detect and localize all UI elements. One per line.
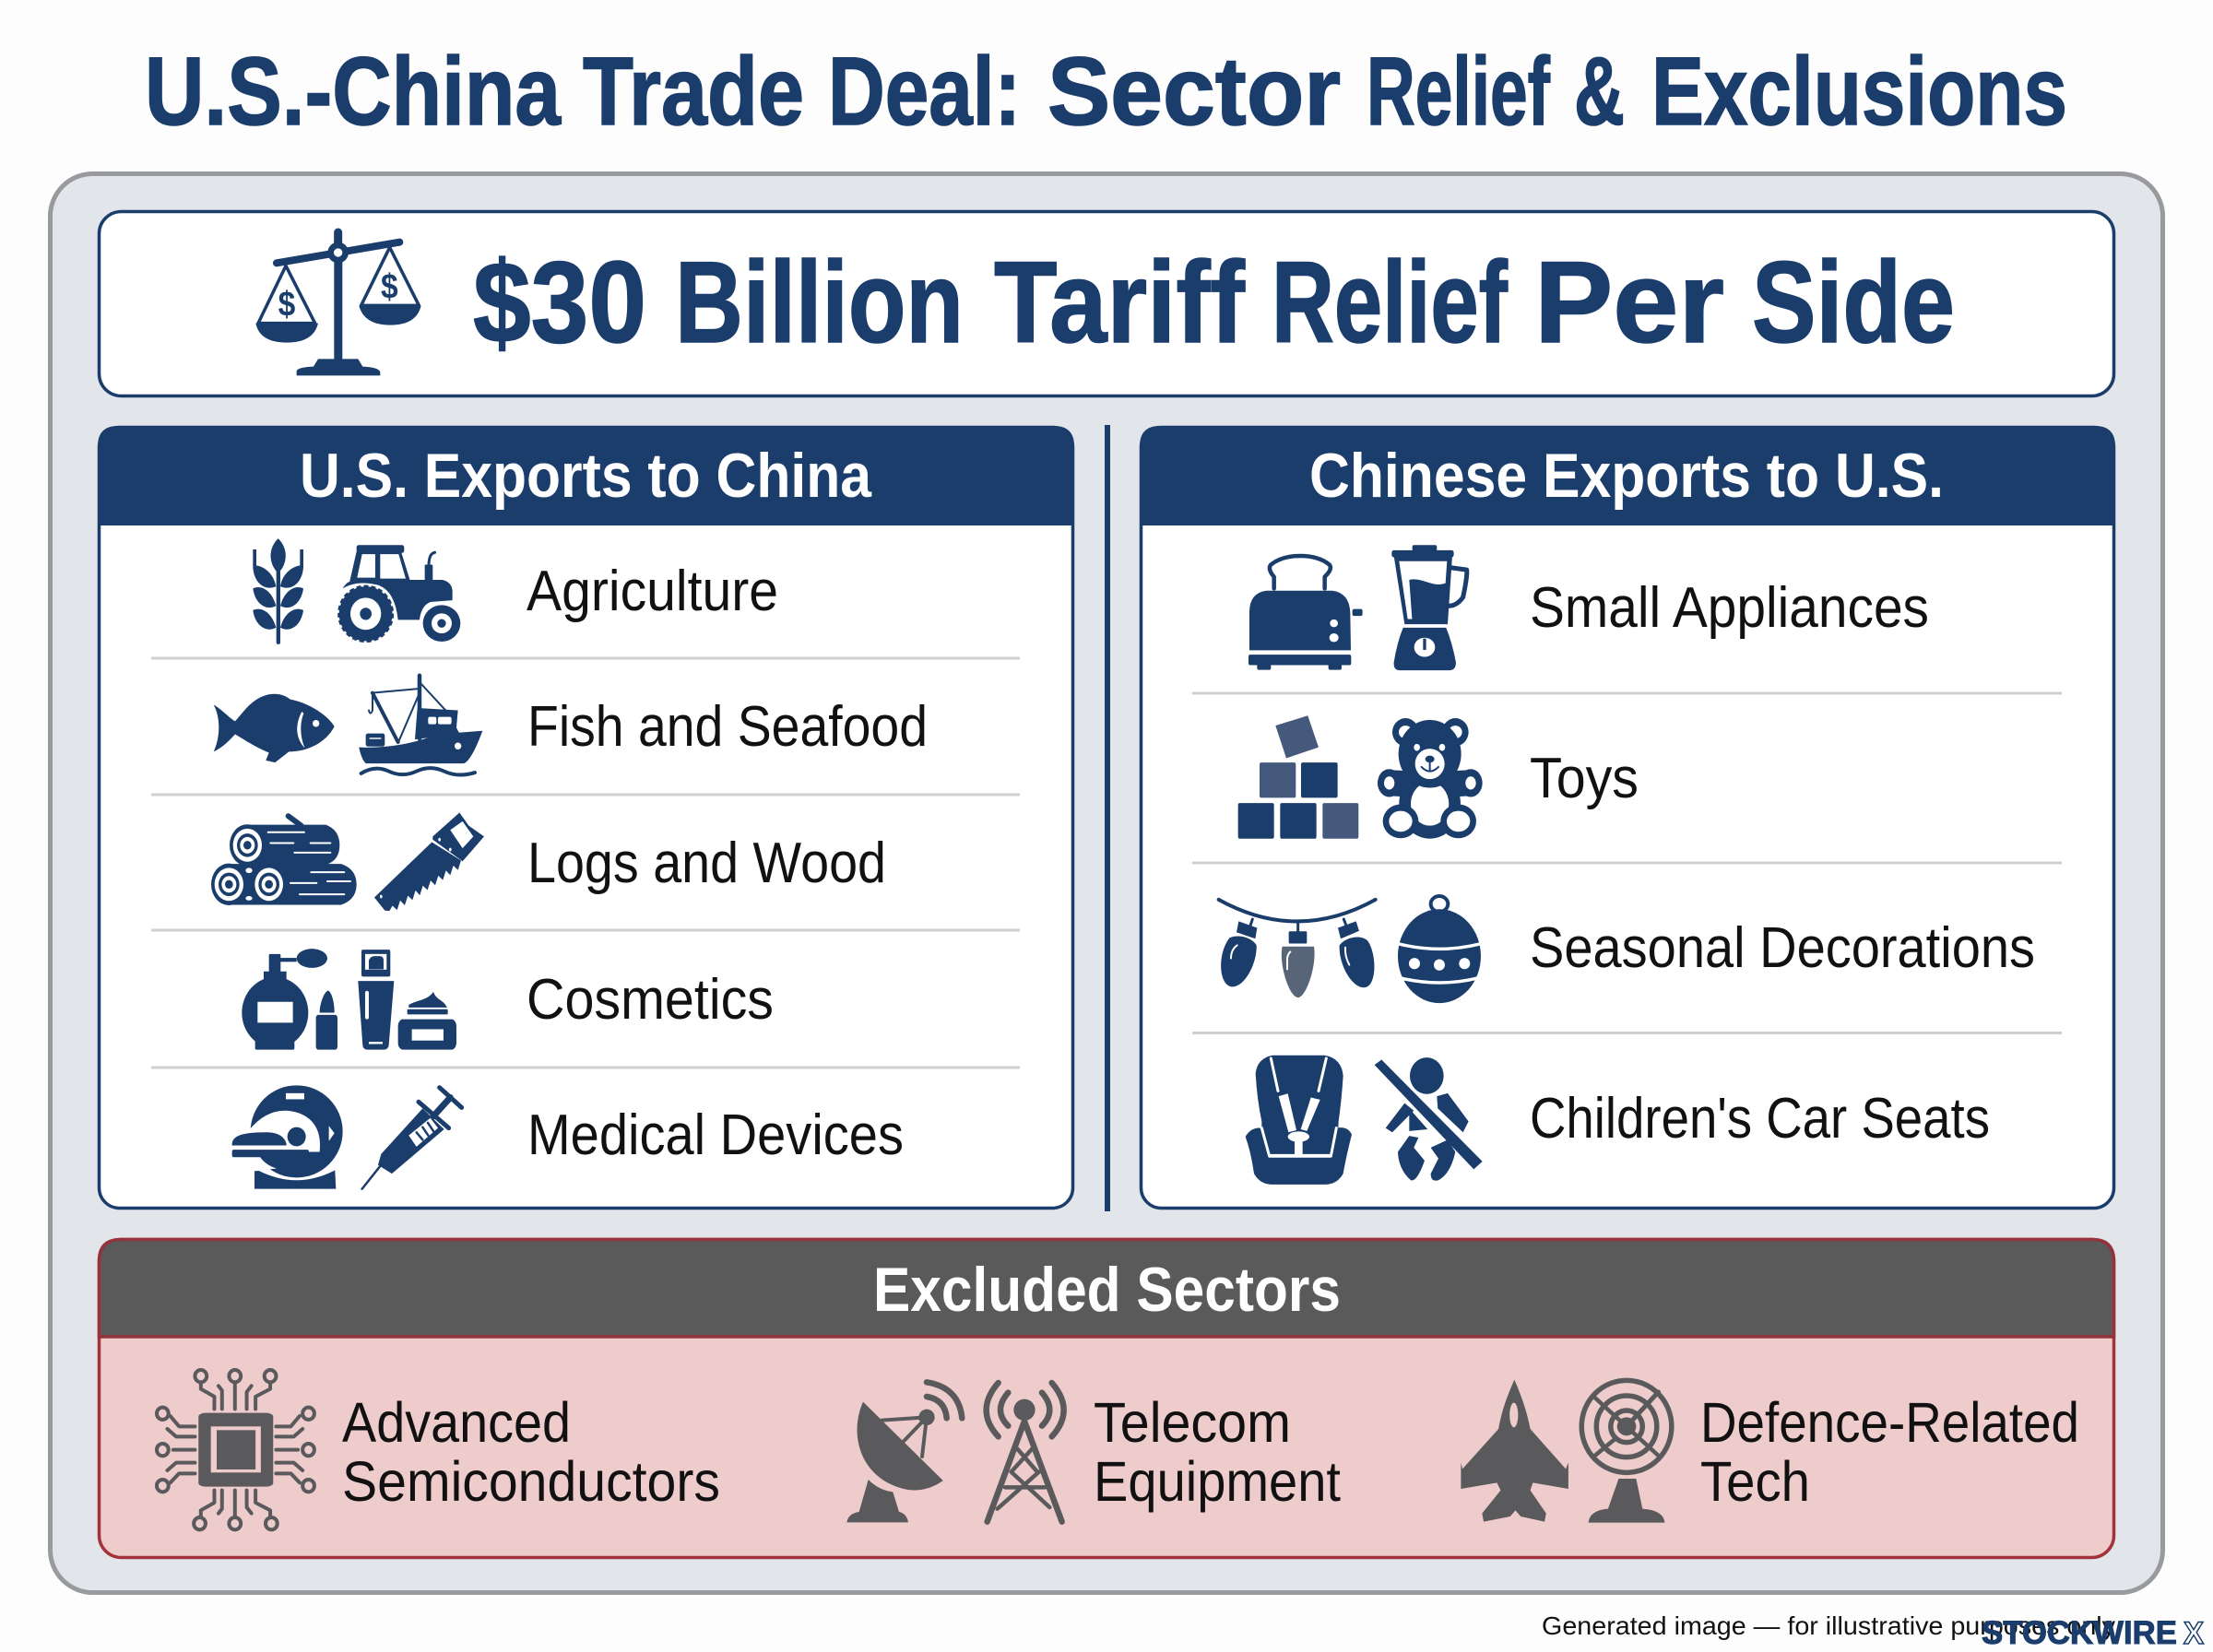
- icon: balance scale with dollars: $: [278, 285, 295, 324]
- panel heading: Excluded Sectors: [873, 1255, 1341, 1325]
- icons: Chinese export sectors: [1219, 545, 1483, 1185]
- banner headline: [473, 239, 1955, 367]
- banner headline: Side: [1752, 239, 1955, 367]
- label: defence-related tech: Defence-Related: [1700, 1391, 2079, 1454]
- icon: string lights: [1219, 900, 1376, 997]
- panel heading: Chinese Exports to U.S.: [1309, 441, 1944, 511]
- icon: cream jar: [398, 992, 456, 1050]
- panel: tariff relief banner: [100, 212, 2113, 396]
- label: defence-related tech: Tech: [1700, 1450, 1810, 1513]
- title: &: [1574, 38, 1625, 146]
- icon: perfume bottle: [242, 949, 327, 1050]
- label: cosmetics: Cosmetics: [527, 968, 774, 1032]
- title: [145, 38, 2067, 146]
- icon: semiconductor chip: [157, 1370, 314, 1529]
- icon: balance scale with dollars: $: [381, 266, 398, 306]
- banner headline: $30: [473, 239, 646, 367]
- icon: blender: [1391, 545, 1467, 670]
- panel: excluded sectors: [100, 1239, 2113, 1558]
- label: telecom equipment: Equipment: [1094, 1450, 1341, 1513]
- icon: fish: [214, 694, 335, 762]
- icon: tractor: [337, 545, 463, 645]
- label: advanced semiconductors: Semiconductors: [342, 1450, 720, 1513]
- icon: antenna tower: [987, 1383, 1064, 1522]
- icon: syringe: [362, 1088, 462, 1189]
- title: Trade: [583, 38, 804, 146]
- icon: satellite dish: [846, 1382, 962, 1522]
- banner headline: Tariff: [994, 239, 1245, 367]
- icon: ornament: [1398, 896, 1481, 1003]
- label: logs and wood: Logs and Wood: [527, 832, 886, 895]
- footer note: Generated image — for illustrative purposes only: [1542, 1611, 2115, 1640]
- icon: radar: [1581, 1380, 1672, 1523]
- label: fish and seafood: Fish and Seafood: [527, 695, 928, 759]
- icon: lotion tube: [358, 950, 394, 1050]
- icons: U.S. export sectors: [211, 538, 484, 1189]
- label: agriculture: Agriculture: [527, 560, 778, 623]
- icon: MRI scanner: [232, 1085, 343, 1189]
- title: Relief: [1367, 38, 1551, 146]
- panel: Chinese exports to U.S.: [1140, 426, 2115, 1208]
- label: medical devices: Medical Devices: [527, 1103, 904, 1167]
- logo: StockWire X: X: [2183, 1616, 2204, 1651]
- label: telecom equipment: Telecom: [1094, 1391, 1291, 1454]
- label: seasonal decorations: Seasonal Decorations: [1530, 916, 2035, 980]
- banner headline: Relief: [1272, 239, 1508, 367]
- icon: toaster: [1249, 556, 1363, 670]
- icon: child car seat: [1246, 1056, 1352, 1185]
- title: Deal:: [828, 38, 1021, 146]
- label: advanced semiconductors: Advanced: [342, 1391, 571, 1454]
- icon: teddy bear: [1378, 718, 1483, 839]
- label: small appliances: Small Appliances: [1530, 576, 1929, 640]
- icon: crossed-out baby: [1375, 1057, 1483, 1181]
- label: telecom equipment: [1094, 1391, 1341, 1513]
- icon: lipstick: [316, 991, 337, 1050]
- icon: balance scale with dollars: [255, 232, 421, 375]
- icon: wheat: [253, 538, 303, 644]
- label: children's car seats: Children's Car Seats: [1530, 1087, 1990, 1150]
- title: Exclusions: [1651, 38, 2067, 146]
- divider between panels: [1105, 425, 1110, 1211]
- banner headline: Billion: [675, 239, 964, 367]
- icon: toy blocks: [1238, 715, 1358, 839]
- title: Sector: [1047, 38, 1341, 146]
- icon: hand saw: [374, 812, 484, 911]
- banner headline: Per: [1534, 239, 1724, 367]
- label: defence-related tech: [1700, 1391, 2079, 1513]
- icon: fishing boat: [359, 676, 482, 775]
- icon: fighter jet: [1461, 1380, 1568, 1522]
- panel heading: U.S. Exports to China: [300, 441, 872, 511]
- icons: fighter jet and radar: [1461, 1380, 1672, 1523]
- logo: StockWire X: STOCKWIRE: [1982, 1615, 2177, 1651]
- label: advanced semiconductors: [342, 1391, 720, 1513]
- icons: satellite dish and antenna tower: [846, 1382, 1064, 1522]
- label: toys: Toys: [1530, 747, 1639, 810]
- title: U.S.-China: [145, 38, 562, 146]
- panel: U.S. exports to China: [98, 426, 1074, 1208]
- icon: logs: [211, 816, 357, 905]
